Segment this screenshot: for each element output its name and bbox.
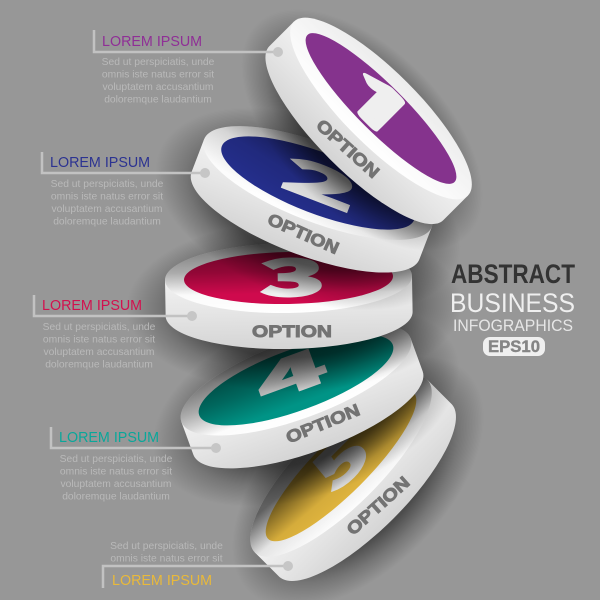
label 2 paragraph: voluptatem accusantium [51, 204, 163, 215]
label 2 paragraph: doloremque laudantium [53, 216, 161, 228]
disc 1 option label: OPTION [312, 116, 383, 182]
disc 5 shadow [230, 350, 490, 600]
title: abstract: ABSTRACT [451, 259, 575, 289]
label 1 dot [273, 47, 283, 57]
label 2 [42, 152, 210, 228]
disc 3 side [165, 276, 413, 351]
label 2 dot [200, 168, 210, 178]
digit 1: 1 [325, 54, 430, 159]
label 3 dot [187, 311, 197, 321]
disc 2 shadow [126, 68, 490, 350]
disc 3 top rim [164, 241, 413, 315]
disc 5 colour face [249, 374, 433, 558]
disc 5 side [255, 380, 456, 581]
disc 3 cast shade [164, 241, 413, 315]
label 4 paragraph: doloremque laudantium [62, 492, 170, 502]
disc 4 colour face [189, 316, 403, 444]
label 3 paragraph: doloremque laudantium [45, 360, 153, 370]
label 3 heading: LOREM IPSUM [42, 298, 142, 314]
label 2 heading: LOREM IPSUM [50, 155, 150, 171]
title: business: BUSINESS [450, 288, 575, 318]
disc 4 cast shade [168, 302, 424, 458]
label 1 paragraph: doloremque laudantium [104, 94, 212, 106]
disc 5 cast shade [226, 351, 456, 581]
label 4 connector [51, 427, 213, 448]
label 1 [94, 30, 283, 106]
label 1 paragraph: omnis iste natus error sit [102, 70, 214, 80]
disc 5 option label: OPTION [343, 473, 414, 539]
disc 2 option label: OPTION [265, 210, 342, 258]
digit 5: 5 [291, 412, 386, 507]
title: infographics: INFOGRAPHICS [453, 317, 573, 335]
label 5 heading: LOREM IPSUM [112, 573, 212, 589]
label 3 paragraph: Sed ut perspiciatis, unde [43, 322, 156, 333]
disc 2 side [178, 139, 432, 296]
label 3 connector [34, 295, 189, 316]
label 1 connector [94, 30, 275, 52]
disc 5 top rim [226, 351, 456, 581]
label 5 [103, 541, 293, 589]
label 1 heading: LOREM IPSUM [102, 34, 202, 50]
disc 3 option label: OPTION [252, 322, 332, 341]
disc 1: purple [198, 0, 526, 294]
label 5 connector [103, 566, 285, 588]
disc 1 shadow [198, 0, 526, 294]
disc 2 cast shade [190, 103, 446, 263]
label 4 dot [211, 443, 221, 453]
label 4 paragraph: Sed ut perspiciatis, unde [60, 454, 173, 465]
disc 4: teal [125, 267, 487, 545]
label 1 paragraph: voluptatem accusantium [102, 82, 214, 93]
title block [450, 259, 575, 356]
disc 4 side [181, 338, 436, 491]
disc 4 shadow [125, 267, 487, 545]
label 1 paragraph: Sed ut perspiciatis, unde [102, 57, 215, 68]
label 4 heading: LOREM IPSUM [59, 430, 159, 446]
disc 4 option label: OPTION [283, 400, 363, 447]
label 5 paragraph: omnis iste natus error sit [110, 554, 223, 564]
label 2 connector [42, 152, 202, 173]
digit 2: 2 [273, 135, 371, 227]
disc 5: gold [223, 348, 490, 600]
label 2 paragraph: omnis iste natus error sit [51, 192, 163, 202]
disc 2: blue [126, 68, 490, 350]
label 2 paragraph: Sed ut perspiciatis, unde [51, 179, 164, 190]
badge: eps10: EPS10 [488, 338, 540, 356]
label 3 paragraph: voluptatem accusantium [43, 347, 155, 358]
label 4 [51, 427, 221, 502]
label 5 dot [283, 561, 293, 571]
disc 3 colour face [184, 250, 393, 306]
label 5 paragraph: Sed ut perspiciatis, unde [110, 541, 223, 552]
disc 4 top rim [168, 302, 424, 458]
label 4 paragraph: omnis iste natus error sit [60, 466, 172, 478]
digit 3: 3 [258, 236, 327, 311]
disc 1 top rim [268, 0, 494, 222]
label 3 [34, 295, 197, 370]
disc 3 shadow [125, 217, 463, 395]
disc 1 side [243, 22, 468, 246]
disc 2 top rim [190, 103, 446, 263]
digit 4: 4 [243, 326, 336, 417]
label 4 paragraph: voluptatem accusantium [60, 479, 172, 490]
disc 3: red [125, 217, 463, 395]
disc 2 colour face [211, 118, 425, 248]
label 3 paragraph: omnis iste natus error sit [43, 334, 155, 346]
disc 1 colour face [291, 18, 471, 199]
